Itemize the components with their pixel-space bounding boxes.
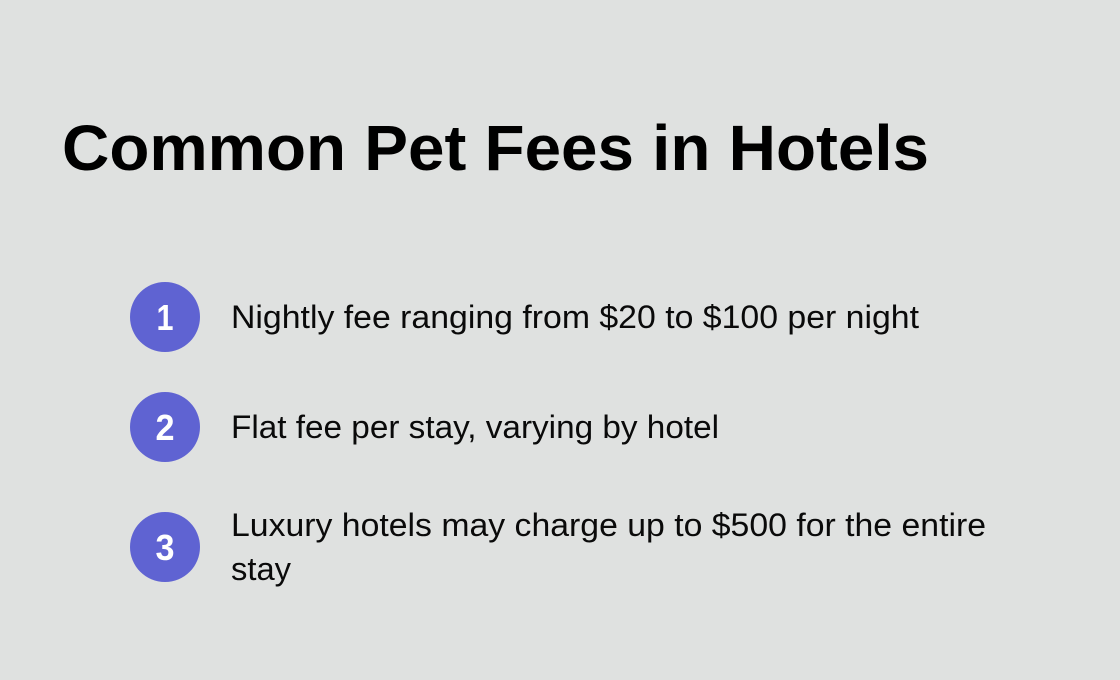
number badge 2 (130, 392, 200, 462)
number badge 1 (130, 282, 200, 352)
list item 1 (130, 282, 919, 352)
item 3 text: stay (231, 551, 291, 587)
list item 3 (130, 507, 986, 587)
number badge 1: 1 (156, 297, 174, 338)
item 3 text: Luxury hotels may charge up to $500 for the entire (231, 507, 986, 543)
item 1 text: Nightly fee ranging from $20 to $100 per night (231, 299, 919, 335)
number badge 2: 2 (156, 407, 174, 448)
list item 2 (130, 392, 719, 462)
number badge 3: 3 (156, 527, 174, 568)
item 3 text (231, 507, 986, 587)
item 2 text: Flat fee per stay, varying by hotel (231, 409, 719, 445)
title: Common Pet Fees in Hotels (62, 112, 929, 184)
number badge 3 (130, 512, 200, 582)
